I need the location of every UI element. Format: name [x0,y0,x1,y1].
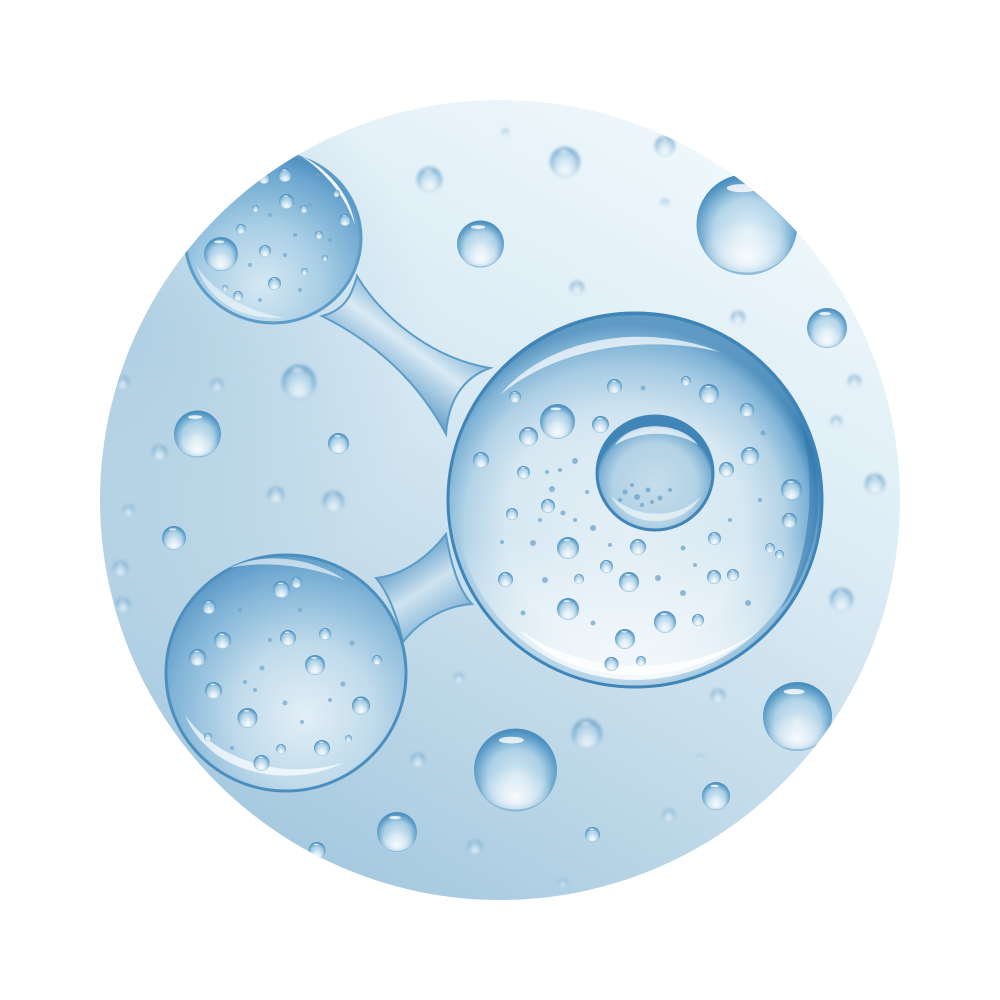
illustration: glass molecule in a circular frame [100,100,900,900]
connector: lower neck [376,534,472,642]
small bubbles inside large sphere [473,376,802,671]
sphere: lower left [166,555,406,791]
blurred background bubbles [113,129,885,887]
floating bubbles [162,174,847,859]
inner sphere [597,416,713,530]
sphere: upper left [185,153,361,323]
connector: upper neck [322,276,490,434]
background circle [100,100,900,900]
sphere: large central [448,313,822,687]
